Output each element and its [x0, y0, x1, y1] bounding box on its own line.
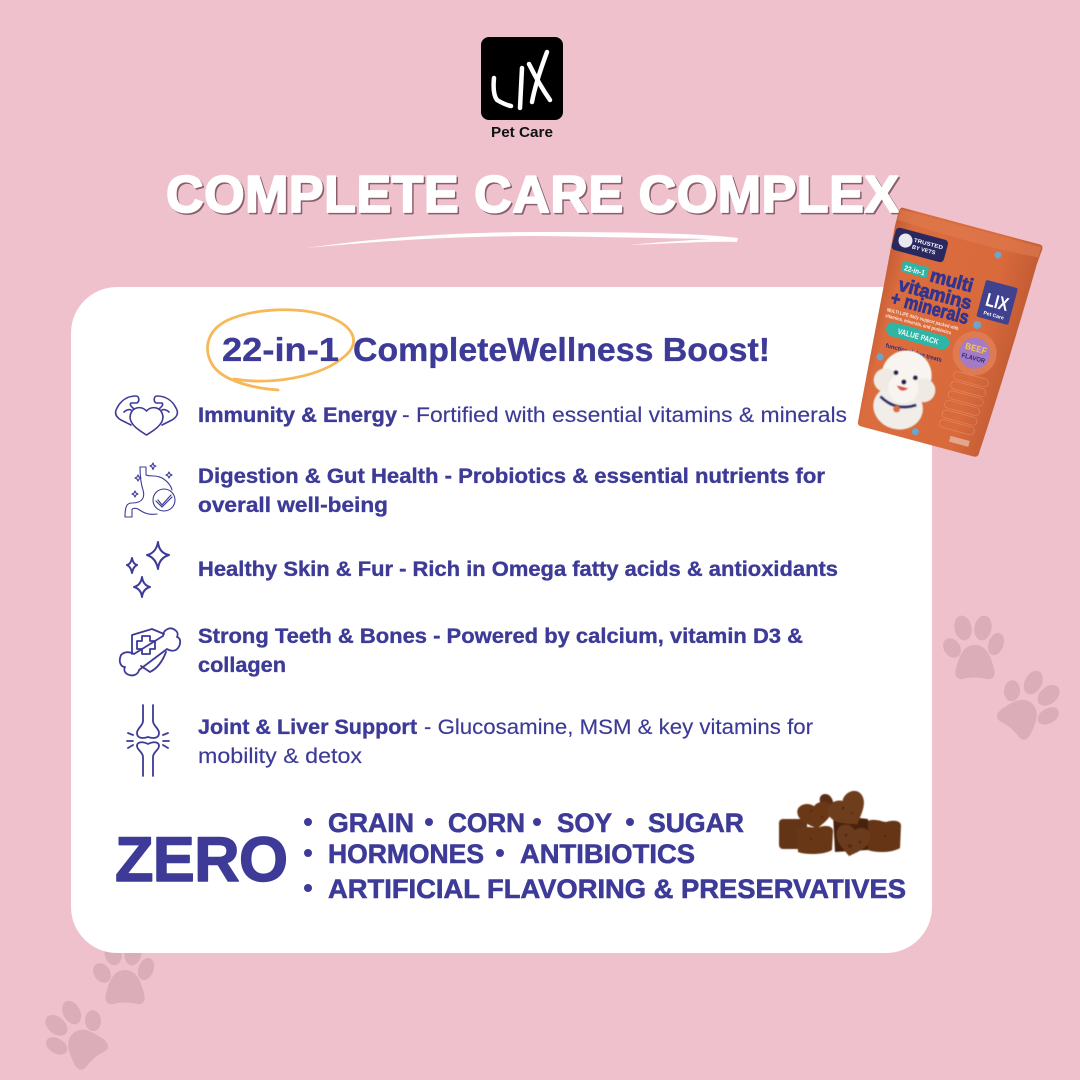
item: immunity and energy: - Fortified with essential vitamins & minerals	[402, 404, 847, 427]
title: COMPLETE CARE COMPLEX	[166, 166, 899, 224]
item: strong teeth and bones	[120, 625, 803, 677]
zero ingredients list: SOY	[557, 808, 612, 838]
feature list	[939, 370, 989, 436]
value pack pill: VALUE PACK	[897, 327, 940, 346]
item: joint and liver support: mobility & detox	[198, 745, 363, 768]
product name: vitamins, minerals, and probiotics	[885, 313, 952, 336]
item: strong teeth and bones: Strong Teeth & Bones - Powered by calcium, vitamin D3 &	[198, 625, 803, 648]
zero ingredients list: SUGAR	[648, 808, 744, 838]
beef flavor seal: FLAVOR	[961, 352, 986, 365]
item: immunity and energy	[116, 396, 847, 435]
cartoon white dog	[862, 343, 944, 437]
product name: vitamins	[896, 275, 974, 314]
item: healthy skin and fur	[127, 542, 838, 597]
product pouch	[843, 207, 1043, 460]
heading with orange hand-drawn circle: CompleteWellness Boost!	[353, 331, 770, 368]
heading with orange hand-drawn circle	[208, 310, 770, 390]
icon: sparkles	[127, 542, 169, 597]
zero ingredients list	[304, 808, 906, 904]
beef flavor seal	[948, 326, 1002, 380]
LIX mini logo: Pet Care	[983, 310, 1005, 322]
heart-shaped treats photo	[779, 787, 901, 860]
value pack pill	[885, 321, 951, 351]
item: joint and liver support: Joint & Liver Support	[198, 716, 417, 739]
item: joint and liver support: - Glucosamine, MSM & key vitamins for	[424, 716, 813, 739]
item: digestion and gut health: overall well-being	[198, 494, 388, 517]
product name: + minerals	[888, 288, 971, 329]
pouch top highlight band	[897, 209, 1041, 260]
item: healthy skin and fur: Healthy Skin & Fur - Rich in Omega fatty acids & antioxidants	[198, 558, 838, 581]
icon: knee joint	[127, 705, 169, 776]
trusted by vets badge: BY VETS	[911, 245, 936, 257]
product name: multi	[928, 266, 975, 297]
zero ingredients list: ARTIFICIAL FLAVORING & PRESERVATIVES	[328, 874, 906, 904]
logo: LIX Pet Care: Pet Care	[491, 125, 553, 141]
functional dog treats label: functional dog treats	[885, 343, 943, 364]
LIX mini logo: LIX	[983, 290, 1011, 316]
trusted by vets badge	[891, 227, 949, 263]
item: digestion and gut health: Digestion & Gut Health - Probiotics & essential nutrients for	[198, 465, 825, 488]
product name: MULTI LIFE daily support packed with	[886, 307, 959, 332]
white content card	[71, 287, 932, 953]
ZERO label: ZERO	[115, 825, 288, 895]
item: immunity and energy: Immunity & Energy	[198, 404, 397, 427]
icon: bone with shield	[120, 628, 180, 675]
brush underline	[306, 232, 738, 248]
zero ingredients list: CORN	[448, 808, 525, 838]
trusted by vets badge: TRUSTED	[913, 238, 944, 251]
item: joint and liver support	[127, 705, 813, 776]
heading with orange hand-drawn circle: 22-in-1	[222, 331, 339, 368]
zero ingredients list: HORMONES	[328, 839, 484, 869]
net weight label	[949, 436, 970, 447]
icon: muscle heart	[116, 396, 177, 435]
icon: stomach with check	[125, 463, 175, 517]
blue paw hearts on pouch	[859, 228, 1002, 445]
item: digestion and gut health	[125, 463, 825, 517]
LIX mini logo	[976, 280, 1018, 325]
beef flavor seal: BEEF	[964, 341, 988, 356]
zero ingredients list: ANTIBIOTICS	[520, 839, 695, 869]
pouch body	[843, 207, 1043, 460]
logo: LIX Pet Care	[481, 37, 563, 141]
product name	[885, 257, 979, 340]
title: COMPLETE CARE COMPLEX	[168, 168, 901, 226]
paw prints: bottom left	[29, 939, 157, 1080]
product name: 22-in-1	[903, 263, 926, 277]
paw prints: upper right	[939, 614, 1076, 750]
zero ingredients list: GRAIN	[328, 808, 414, 838]
item: strong teeth and bones: collagen	[198, 654, 286, 677]
